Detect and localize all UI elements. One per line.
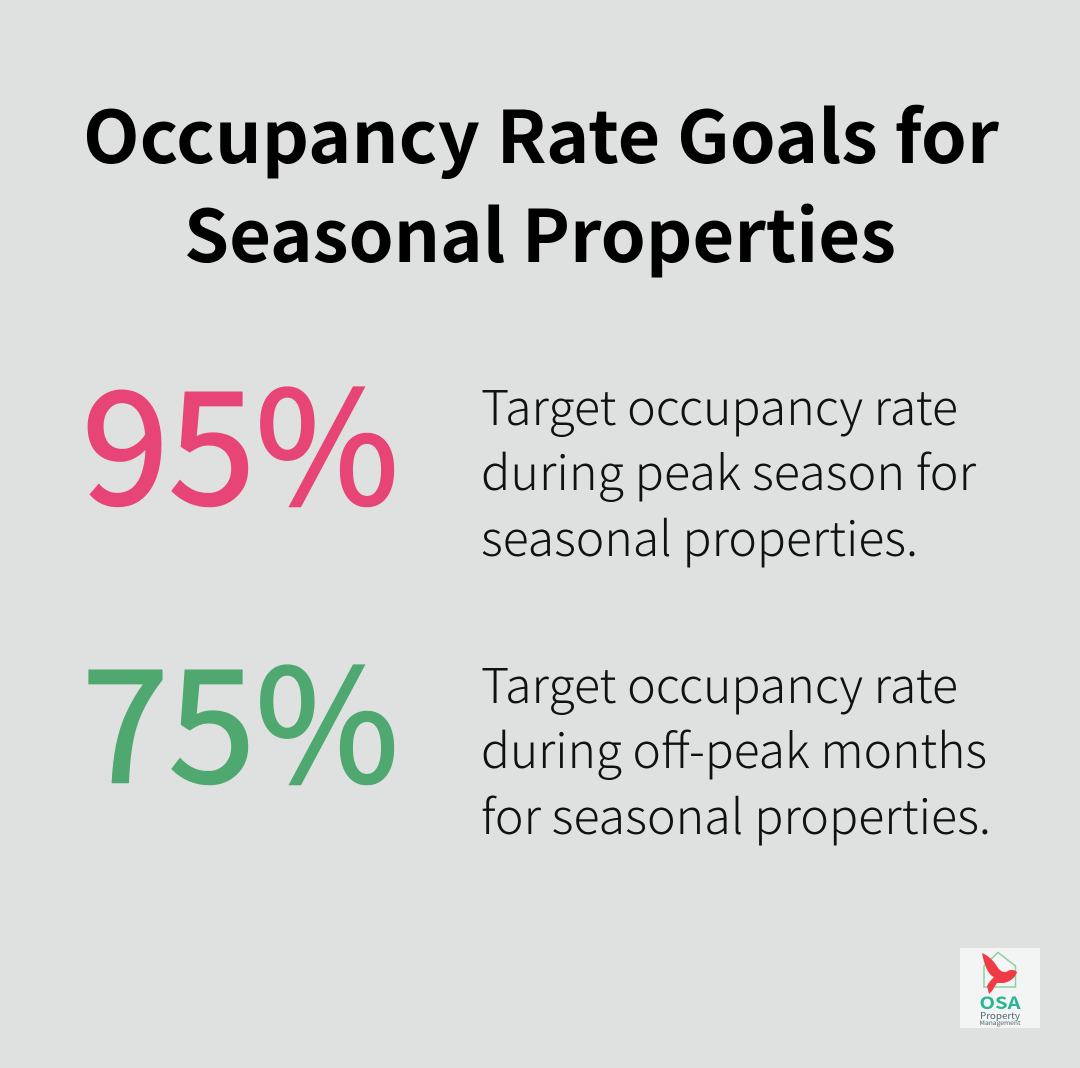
stat description peak season: seasonal properties.	[481, 500, 918, 570]
stat description peak season: Target occupancy rate	[481, 369, 958, 439]
logo: OSA Property Management: Property	[980, 1009, 1020, 1022]
title: Occupancy Rate Goals for	[83, 79, 1000, 184]
stat: 95% peak season	[82, 323, 977, 570]
icon: house outline	[984, 952, 1016, 987]
stat description peak season	[481, 369, 977, 570]
stat number 95%: 95%	[82, 323, 399, 549]
stat description off-peak: during off-peak months	[481, 712, 987, 782]
logo: OSA Property Management: Management	[980, 1018, 1021, 1027]
logo: OSA Property Management	[960, 948, 1040, 1028]
logo wordmark: OSA	[980, 989, 1021, 1014]
stat description peak season: during peak season for	[481, 434, 977, 504]
stat description off-peak	[481, 647, 991, 848]
stat: 75% off-peak	[82, 601, 991, 848]
title: Seasonal Properties	[184, 178, 896, 283]
stat description off-peak: Target occupancy rate	[481, 647, 958, 717]
stat number 75%: 75%	[82, 601, 399, 827]
icon: red bird	[982, 953, 1017, 994]
title	[83, 79, 1000, 283]
stat description off-peak: for seasonal properties.	[481, 778, 991, 848]
